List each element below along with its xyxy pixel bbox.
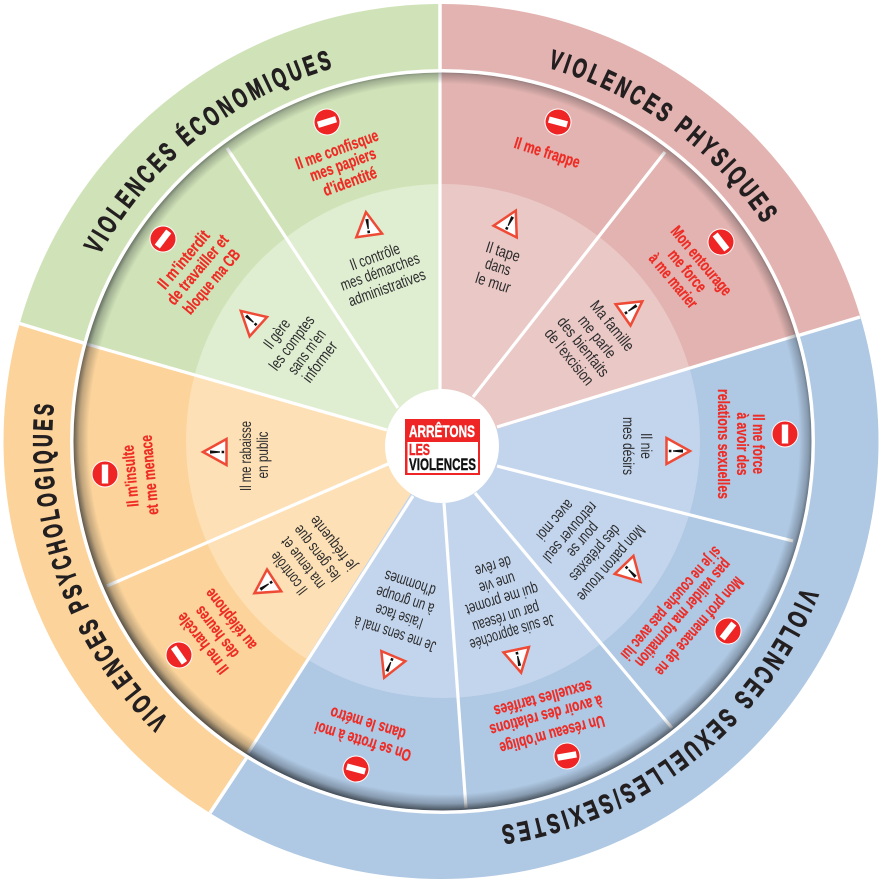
icon: no entry bbox=[340, 753, 372, 785]
icon: warning bbox=[353, 210, 382, 237]
heading: violences physiques: VIOLENCES PHYSIQUES bbox=[552, 49, 777, 222]
red label: de travailler et bbox=[163, 231, 233, 309]
text: je me sens mal: à un groupe bbox=[374, 582, 436, 617]
text: il contrôle ma tenue: je fréquente bbox=[307, 512, 361, 574]
heading: violences économiques: VIOLENCES ÉCONOMIQUES bbox=[82, 50, 331, 252]
heading: violences psychologiques: VIOLENCES PSYCHOLOGIQUES bbox=[32, 404, 166, 734]
text: il me rabaisse en public: Il me rabaisse bbox=[238, 421, 255, 491]
heading: violences sexuelles/sexistes: VIOLENCES SEXUELLES/SEXISTES bbox=[502, 591, 820, 844]
red label: et me menace bbox=[138, 434, 162, 516]
icon: warning bbox=[372, 651, 405, 683]
red label: Il m'insulte bbox=[119, 444, 143, 508]
icon: no entry bbox=[161, 637, 197, 673]
red label: mes papiers bbox=[308, 145, 378, 185]
text: il contrôle mes démarches: administratives bbox=[346, 267, 428, 310]
text: ma famille: Ma famille bbox=[586, 298, 637, 355]
text: il contrôle ma tenue: les gens que bbox=[290, 521, 344, 584]
panel: violences économiques bbox=[145, 106, 428, 386]
text: ma famille: me parle bbox=[574, 313, 619, 362]
red label: Il me frappe bbox=[512, 134, 582, 172]
icon: no entry bbox=[311, 106, 343, 138]
text: je suis approchée: qui me promet bbox=[463, 579, 540, 618]
white ring bbox=[70, 69, 815, 814]
icon: no entry bbox=[92, 461, 118, 487]
panel: violences physiques bbox=[473, 106, 739, 389]
logo: arrêtons les violences: VIOLENCES bbox=[409, 455, 476, 474]
red label bbox=[488, 676, 606, 757]
red label bbox=[617, 543, 747, 679]
red label: me force bbox=[664, 246, 710, 296]
text: il me rabaisse en public bbox=[238, 421, 272, 491]
text: il contrôle mes démarches: mes démarches bbox=[338, 250, 422, 295]
icon: warning bbox=[232, 301, 267, 336]
text: il contrôle ma tenue: Il contrôle bbox=[267, 548, 311, 598]
icon: no entry bbox=[772, 421, 798, 447]
text: il contrôle mes démarches bbox=[338, 241, 428, 310]
text: je suis approchée: par un réseau bbox=[470, 598, 541, 635]
text: je suis approchée bbox=[463, 552, 556, 653]
text: mon patron trouve bbox=[532, 496, 648, 604]
text: il tape dans le mur: le mur bbox=[473, 270, 513, 297]
text: il gère les comptes: sans m'en bbox=[285, 326, 330, 378]
center white disc bbox=[385, 389, 499, 503]
red label: à avoir des bbox=[733, 412, 751, 476]
panel: violences sexuelles bbox=[313, 389, 798, 785]
text: il nie mes désirs: mes désirs bbox=[619, 417, 636, 475]
text: il contrôle ma tenue bbox=[267, 512, 361, 598]
red label: Il m'interdit bbox=[154, 227, 214, 293]
text: je me sens mal bbox=[352, 566, 438, 655]
red label: à me marier bbox=[645, 250, 701, 312]
icon: warning bbox=[203, 439, 226, 465]
red label bbox=[173, 585, 261, 677]
text: il tape dans le mur bbox=[473, 239, 522, 297]
red label: Mon entourage bbox=[667, 223, 735, 299]
text: ma famille bbox=[541, 298, 637, 389]
red label: pas valider ma formation bbox=[631, 555, 735, 671]
logo: arrêtons les violences: LES bbox=[409, 442, 430, 459]
icon: no entry bbox=[703, 224, 739, 260]
icon: warning bbox=[247, 569, 281, 604]
red label: dans le métro bbox=[328, 703, 408, 743]
text: mon patron trouve: Mon patron trouve bbox=[573, 521, 648, 604]
text: je suis approchée: de rêve bbox=[473, 552, 513, 579]
red label: bloque ma CB bbox=[180, 246, 244, 318]
text: il tape dans le mur: dans bbox=[483, 255, 513, 279]
icon: no entry bbox=[145, 221, 181, 257]
red label bbox=[293, 127, 381, 200]
red label bbox=[313, 703, 413, 764]
icon: warning bbox=[504, 647, 534, 675]
red label: à avoir des relations bbox=[488, 691, 604, 739]
icon: warning bbox=[616, 291, 650, 326]
text: mon patron trouve: retrouver seul bbox=[539, 498, 600, 565]
text: je suis approchée: une vie bbox=[477, 569, 517, 596]
text: il gère les comptes bbox=[261, 313, 342, 386]
text: je suis approchée: Je suis approchée bbox=[467, 611, 556, 653]
text: ma famille: des bienfaits bbox=[553, 314, 612, 381]
text: il contrôle mes démarches: Il contrôle bbox=[348, 241, 403, 274]
logo: arrêtons les violences: ARRÊTONS bbox=[409, 422, 475, 441]
text: mon patron trouve: avec moi bbox=[532, 496, 577, 543]
text: il nie mes désirs bbox=[619, 417, 654, 475]
red label: Il me harcèle bbox=[173, 609, 233, 677]
text: il me rabaisse en public: en public bbox=[255, 432, 272, 478]
red label bbox=[154, 227, 244, 318]
icon: no entry bbox=[710, 613, 746, 649]
text: il tape dans le mur: Il tape bbox=[484, 239, 522, 266]
text: il contrôle ma tenue: ma tenue et bbox=[278, 533, 329, 592]
red label: si je ne couche pas avec lui bbox=[617, 543, 725, 663]
icon: no entry bbox=[542, 106, 574, 138]
text: mon patron trouve: pour se bbox=[563, 519, 602, 560]
red label: au téléphone bbox=[201, 585, 261, 653]
inner wheel wedges bbox=[74, 72, 812, 810]
red label: Il me force bbox=[749, 414, 767, 474]
red label: On se frotte à moi bbox=[313, 718, 413, 764]
panel: violences psychologiques bbox=[92, 421, 361, 677]
text: il nie mes désirs: Il nie bbox=[637, 433, 654, 459]
red label bbox=[119, 434, 162, 516]
red label: Mon prof menace de ne bbox=[651, 573, 747, 679]
icon: warning bbox=[666, 438, 690, 464]
text: mon patron trouve: des prétextes bbox=[566, 521, 624, 584]
red label: Il me confisque bbox=[293, 127, 381, 173]
icon: warning bbox=[494, 205, 527, 237]
red label: sexuelles tarifées bbox=[492, 676, 594, 720]
text: je me sens mal: Je me sens mal à bbox=[352, 612, 438, 655]
red label: des heures bbox=[191, 602, 243, 662]
red label: relations sexuelles bbox=[714, 389, 732, 499]
text: il gère les comptes: Il gère bbox=[261, 316, 294, 353]
red label: Un réseau m'oblige bbox=[498, 711, 606, 757]
icon: warning bbox=[615, 556, 650, 591]
icon: no entry bbox=[552, 741, 582, 771]
text: il gère les comptes: les comptes bbox=[266, 313, 318, 374]
text: il gère les comptes: informer bbox=[299, 338, 342, 386]
red label: d'identité bbox=[321, 164, 379, 200]
text: je me sens mal: d'hommes bbox=[382, 566, 438, 599]
text: ma famille: de l'excision bbox=[541, 326, 597, 389]
logo: arrêtons les violences bbox=[405, 419, 480, 475]
text: je me sens mal: l'aise face bbox=[373, 600, 425, 631]
red label bbox=[645, 223, 735, 312]
red label bbox=[714, 389, 767, 499]
